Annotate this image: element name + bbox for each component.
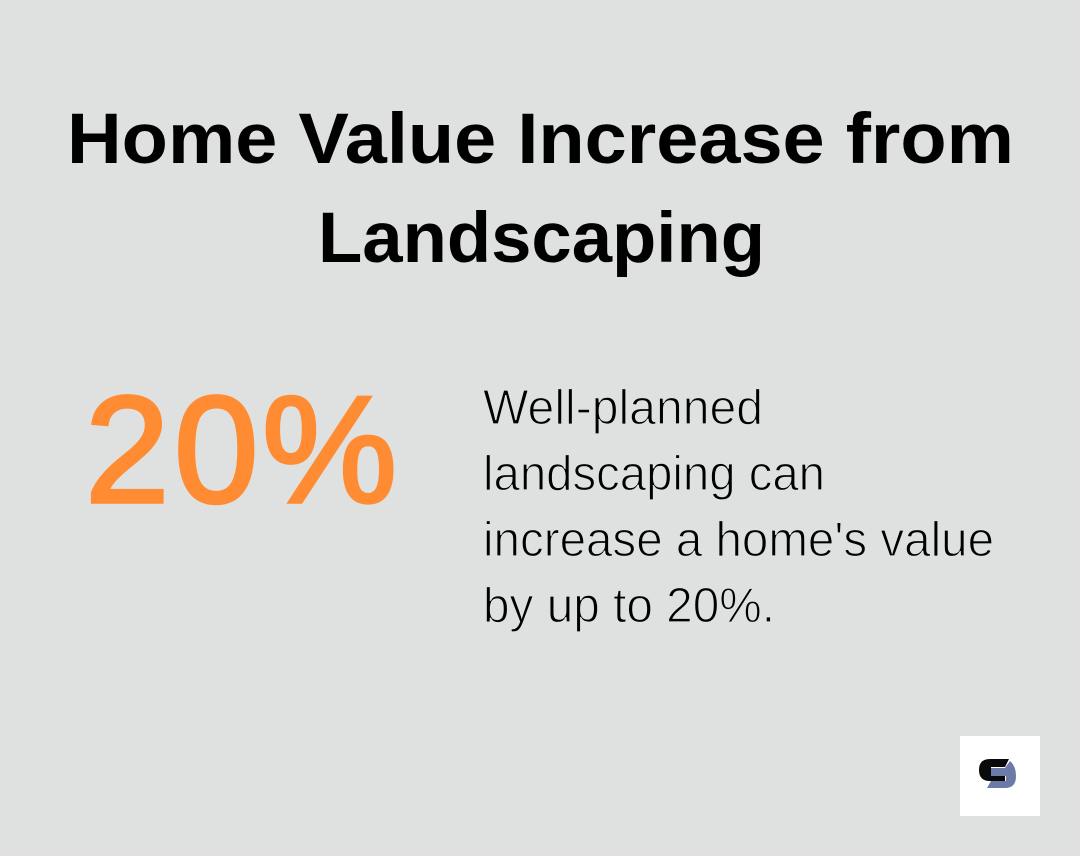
logo badge xyxy=(960,736,1040,816)
title: Landscaping xyxy=(318,199,765,278)
icon: logo S blue part xyxy=(987,761,1016,788)
icon: logo S black part xyxy=(979,759,1009,781)
big statistic: 20%: 20% xyxy=(85,365,397,535)
description text: landscaping can xyxy=(483,447,825,501)
title: Home Value Increase from xyxy=(67,100,1014,179)
description text: by up to 20%. xyxy=(483,579,775,633)
description text: Well-planned xyxy=(483,381,763,435)
description text xyxy=(483,381,994,633)
description text: increase a home's value xyxy=(483,513,994,567)
title xyxy=(67,100,1014,278)
